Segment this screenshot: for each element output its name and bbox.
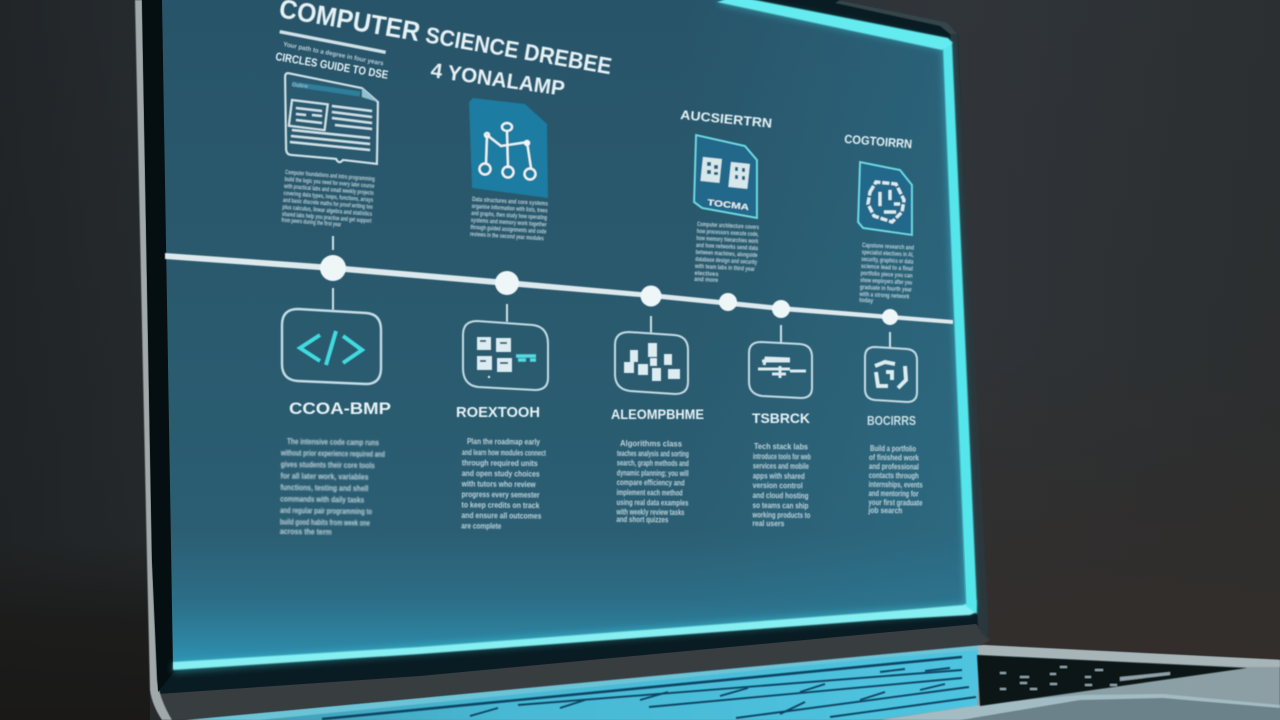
text block 5: job search xyxy=(867,506,903,515)
upper text block 4: with a strong network xyxy=(859,291,910,301)
upper text block 2: reviews in the second year modules xyxy=(470,231,544,242)
upper text block 4: specialist electives in AI, xyxy=(862,249,914,259)
text block 5: of finished work xyxy=(869,453,920,463)
label: TSBRCK xyxy=(752,410,810,426)
text block 2: to keep credits on track xyxy=(461,500,540,510)
upper text block 1 xyxy=(280,169,376,231)
text block 4: so teams can ship xyxy=(752,501,809,510)
text block 1: gives students their core tools xyxy=(281,460,375,470)
upper text block 2 xyxy=(470,196,549,243)
text block 1: without prior experience required and xyxy=(280,448,385,459)
icon: architecture card xyxy=(694,135,757,218)
upper text block 3: how processors execute code, xyxy=(697,228,759,238)
icon: code tag xyxy=(282,309,381,384)
milestone 5: portfolio xyxy=(865,347,917,428)
intro text block: Your path to a degree in four years xyxy=(283,41,384,68)
text block 4: Tech stack labs xyxy=(754,442,809,451)
text block 3 xyxy=(616,439,690,525)
label: CCOA-BMP xyxy=(289,399,391,418)
upper text block 4: science lead to a final xyxy=(861,263,913,273)
text block 4: version control xyxy=(753,481,803,491)
upper text block 3: Computer architecture covers xyxy=(697,221,759,231)
label: BOCIRRS xyxy=(867,413,916,428)
laptop base xyxy=(170,645,1280,720)
upper text block 2: systems and memory work together xyxy=(471,217,547,229)
upper text block 1: plus calculus, linear algebra and statistics xyxy=(282,204,373,218)
upper text block 4: show employers after you xyxy=(860,277,912,287)
text block 5: internships, events xyxy=(869,480,923,490)
text block 5 xyxy=(867,444,924,516)
upper text block 1: with practical labs and small weekly projects xyxy=(283,183,374,197)
upper text block 3: and how networks send data xyxy=(696,242,758,252)
trackpad xyxy=(960,697,1280,720)
text block 2: Plan the roadmap early xyxy=(467,437,541,447)
text block 3: search, graph methods and xyxy=(617,459,689,468)
upper text block 1: covering data types, loops, functions, arrays xyxy=(283,190,374,204)
upper text block 3: electives xyxy=(694,270,719,278)
milestone nodes xyxy=(320,255,898,325)
upper text block 1: and basic discrete maths for proof writing too xyxy=(283,197,373,211)
text block 4: real users xyxy=(752,519,785,528)
upper text block 1: build the logic you need for every later course xyxy=(284,176,375,190)
icon: circuit badge xyxy=(865,347,917,402)
label: ROEXTOOH xyxy=(456,405,540,421)
upper text block 2: organise information with lists, trees xyxy=(471,203,548,215)
upper text block 4: graduate in fourth year xyxy=(860,284,912,294)
upper text block 3: database design and security xyxy=(695,256,758,266)
icon: architecture card: TOCMA xyxy=(707,197,750,212)
text block 1: build good habits from week one xyxy=(280,517,370,528)
text block 5: Build a portfolio xyxy=(870,444,916,453)
silver edge xyxy=(135,0,172,720)
upper text block 3: how memory hierarchies work xyxy=(696,235,759,245)
text block 5: contacts through xyxy=(869,471,919,481)
text block 2: with tutors who review xyxy=(461,479,537,489)
laptop lid bezel xyxy=(135,0,988,720)
text block 1: The intensive code camp runs xyxy=(287,437,380,447)
connector stubs xyxy=(333,236,890,348)
text block 4: introduce tools for web xyxy=(753,452,811,461)
text block 1: for all later work, variables xyxy=(280,471,369,482)
icon: stack blocks xyxy=(749,342,812,398)
text block 2: progress every semester xyxy=(462,490,540,500)
milestone 2: roadmap xyxy=(456,321,548,421)
upper text block 2: through guided assignments and code xyxy=(470,224,547,236)
text block 3: Algorithms class xyxy=(620,439,683,449)
screen glow edges xyxy=(173,0,977,670)
text block 2: and ensure all outcomes xyxy=(461,511,542,521)
icon: chip card xyxy=(858,162,912,235)
text block 2: and learn how modules connect xyxy=(462,448,546,458)
text block 3: with weekly review tasks xyxy=(616,508,685,517)
text block 1: and regular pair programming to xyxy=(280,506,372,516)
upper text block 1: from peers during the first year xyxy=(281,217,342,229)
text block 5: your first graduate xyxy=(868,498,923,508)
text block 2: through required units xyxy=(462,458,538,468)
text block 3: using real data examples xyxy=(616,498,689,507)
text block 3: implement each method xyxy=(617,488,683,498)
text block 4: services and mobile xyxy=(753,462,809,471)
text block 3: teaches analysis and sorting xyxy=(617,449,689,458)
text block 4: apps with shared xyxy=(753,471,805,481)
text block 2: are complete xyxy=(461,521,502,531)
timeline xyxy=(165,236,953,348)
icon: document xyxy=(285,73,378,164)
upper text block 2: and graphs, then study how operating xyxy=(471,210,547,222)
silver top strip xyxy=(978,645,1280,667)
upper text block 4: Capstone research and xyxy=(862,242,914,252)
text block 5: and mentoring for xyxy=(869,489,919,499)
lit deck xyxy=(184,645,980,720)
upper text block 4: portfolio piece you can xyxy=(860,270,913,280)
milestone 4: tech stack xyxy=(749,342,812,426)
icon: document: Outline xyxy=(292,82,308,90)
upper text block 3 xyxy=(693,221,759,286)
intro text block: CIRCLES GUIDE TO DSE xyxy=(275,51,389,82)
text block 1 xyxy=(279,437,385,537)
subtitle: 4 YONALAMP xyxy=(429,59,566,101)
upper text block 4: today xyxy=(859,297,874,305)
text block 1: functions, testing and shell xyxy=(280,483,368,493)
text block 1: commands with daily tasks xyxy=(280,494,365,505)
text block 3: compare efficiency and xyxy=(617,478,685,488)
text block 3: and short quizzes xyxy=(616,515,669,524)
milestone 1: code camp xyxy=(282,309,391,418)
upper text block 3: between machines, alongside xyxy=(695,249,758,259)
label: ALEOMPBHME xyxy=(611,406,704,422)
icon: algorithm blocks xyxy=(615,332,688,394)
text block 5: and professional xyxy=(869,462,919,472)
upper text block 1: Computer foundations and intro programming xyxy=(285,169,375,183)
text block 4: and cloud hosting xyxy=(753,491,809,500)
icon: flowchart tile xyxy=(469,98,548,198)
icon: grid tiles xyxy=(463,321,548,390)
upper text block 3: and more xyxy=(694,276,719,284)
intro text block xyxy=(275,30,389,82)
text block 2: and open study choices xyxy=(462,469,540,479)
screen xyxy=(162,0,966,668)
heading: fourth column: COGTOIRRN xyxy=(844,134,912,151)
upper text block 4 xyxy=(858,242,915,307)
upper text block 2: Data structures and core systems xyxy=(472,196,548,208)
text block 4 xyxy=(752,442,811,529)
heading: third column: AUCSIERTRN xyxy=(680,107,773,131)
upper text block 4: security, graphics or data xyxy=(861,256,914,266)
milestone 3: algorithms xyxy=(611,332,704,422)
text block 3: dynamic planning; you will xyxy=(617,468,689,478)
upper text block 1: shared labs help you practise and get support xyxy=(282,211,372,225)
upper text block 3: with team labs in third year xyxy=(694,263,755,273)
keyboard xyxy=(322,655,1247,719)
text block 2 xyxy=(460,437,546,531)
text block 4: working products to xyxy=(752,511,811,520)
hinge band xyxy=(156,622,990,720)
text block 1: across the term xyxy=(280,527,332,537)
